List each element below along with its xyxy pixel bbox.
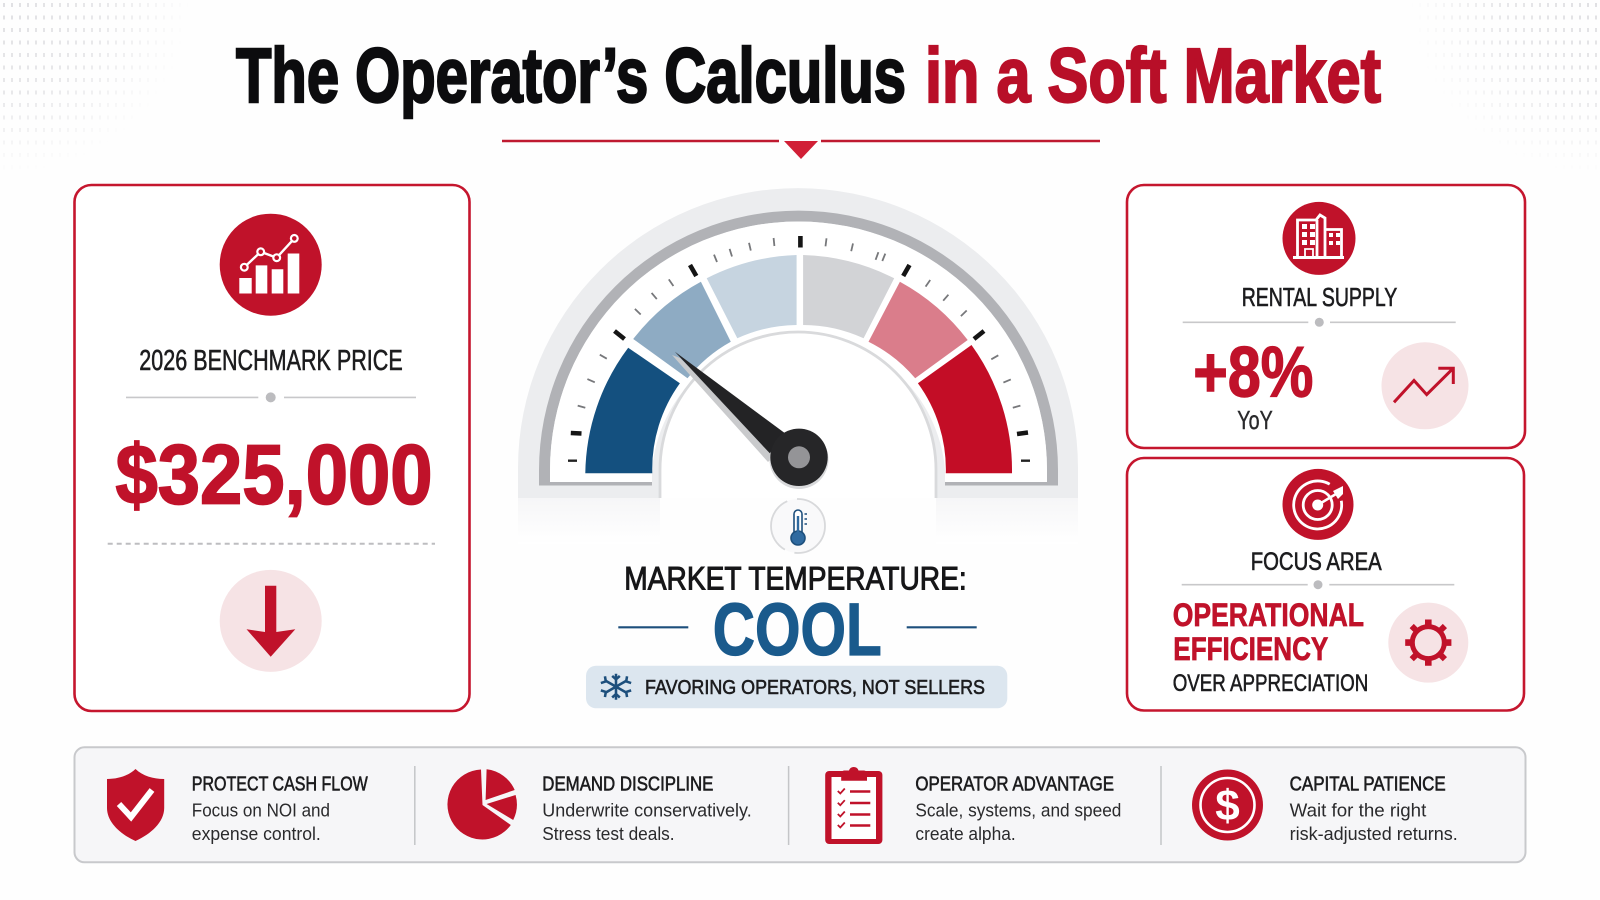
callout: favoring operators: FAVORING OPERATORS, NOT SELLERS: [645, 676, 985, 699]
label: YoY: YoY: [1237, 405, 1273, 435]
icon: bar and line chart: [220, 214, 322, 316]
focus text: [1173, 597, 1368, 697]
item: capital patience: risk-adjusted returns.: [1290, 824, 1458, 844]
item: capital patience: CAPITAL PATIENCE: [1290, 774, 1446, 796]
item: operator advantage: create alpha.: [915, 824, 1016, 844]
item: demand discipline: Stress test deals.: [542, 824, 675, 844]
panel: focus area: [1127, 458, 1524, 710]
focus text: OPERATIONAL: [1173, 597, 1364, 633]
heading: 2026 benchmark price: 2026 BENCHMARK PRICE: [139, 345, 403, 377]
gauge: [518, 188, 1078, 544]
icon: snowflake: [601, 674, 631, 700]
price value: $325,000: [116, 427, 432, 521]
market status: cool: COOL: [713, 588, 882, 671]
icon: shield: [107, 769, 164, 841]
item: demand discipline: Underwrite conservatively.: [542, 801, 752, 821]
icon: down arrow: [220, 570, 322, 672]
icon: target: [1282, 469, 1354, 540]
gauge segments: [585, 255, 1012, 473]
strategy bar: [74, 747, 1526, 862]
panel: benchmark price: [74, 185, 470, 711]
icon: pie chart: [447, 769, 517, 839]
icon: thermometer: [771, 499, 825, 553]
heading: market temperature: MARKET TEMPERATURE:: [624, 560, 967, 596]
icon: dollar coin: $: [1215, 782, 1240, 830]
focus text: OVER APPRECIATION: [1173, 670, 1368, 697]
title: in a Soft Market: [925, 33, 1381, 119]
title: The Operator’s Calculus: [236, 33, 906, 119]
item: protect cash flow: expense control.: [192, 824, 321, 844]
item: capital patience: Wait for the right: [1290, 801, 1426, 821]
focus text: EFFICIENCY: [1173, 631, 1328, 667]
title divider with pointer: [502, 141, 1100, 159]
icon: trend arrow: [1382, 342, 1468, 429]
item: protect cash flow: Focus on NOI and: [192, 801, 330, 821]
item: operator advantage: [825, 767, 1121, 844]
value: +8%: +8%: [1193, 333, 1313, 412]
panel: rental supply: [1127, 185, 1525, 448]
item: protect cash flow: [107, 769, 368, 844]
icon: buildings: [1282, 202, 1356, 275]
item: operator advantage: OPERATOR ADVANTAGE: [915, 774, 1114, 796]
item: capital patience: [1192, 770, 1458, 844]
item: protect cash flow: PROTECT CASH FLOW: [192, 774, 368, 796]
icon: gear: [1388, 603, 1468, 683]
icon: dollar coin: [1192, 770, 1263, 840]
gauge needle: [672, 352, 828, 489]
icon: clipboard: [825, 767, 882, 844]
heading: focus area: FOCUS AREA: [1251, 548, 1382, 576]
item: operator advantage: Scale, systems, and speed: [915, 801, 1121, 821]
item: demand discipline: DEMAND DISCIPLINE: [542, 774, 713, 796]
item: demand discipline: [447, 769, 752, 844]
callout: favoring operators: [586, 666, 1007, 708]
heading: rental supply: RENTAL SUPPLY: [1242, 282, 1397, 312]
